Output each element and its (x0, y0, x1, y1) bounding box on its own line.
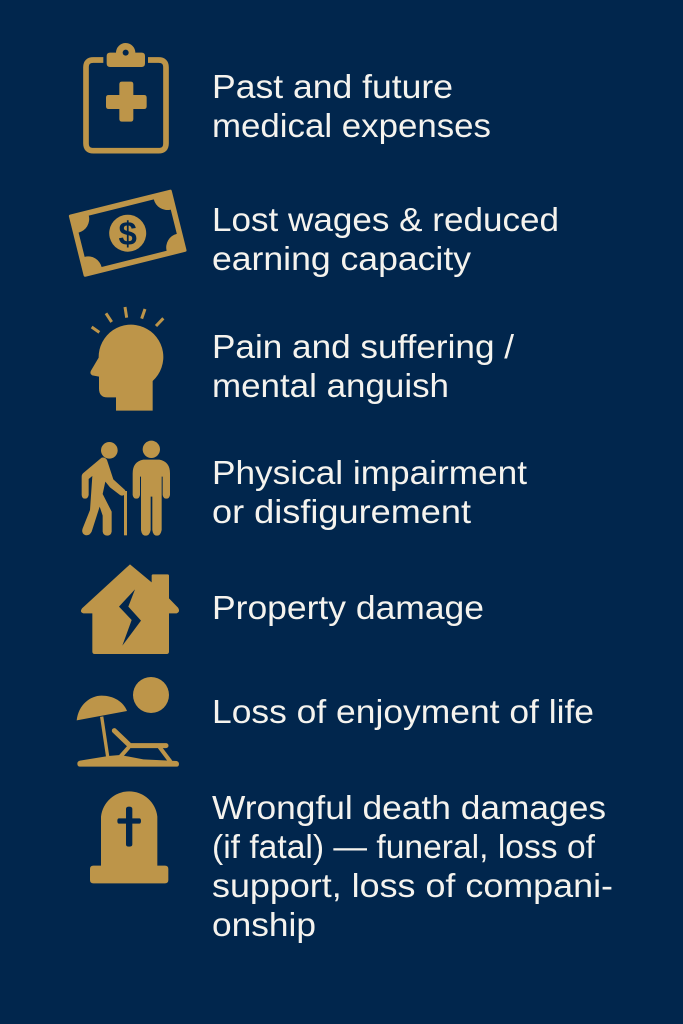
icon: head with pain rays (90, 307, 163, 411)
text: medical expenses: medical expenses (212, 107, 491, 144)
text: property damage: Property damage (212, 589, 484, 626)
text: pain and suffering: mental anguish (212, 367, 449, 404)
text: lost wages (212, 201, 559, 277)
icon: two people with cane (82, 441, 170, 536)
icon: banknote: $ (119, 215, 137, 252)
text: wrongful death damages (212, 789, 613, 943)
icon: banknote (69, 189, 187, 277)
text: physical impairment: or disfigurement (212, 493, 471, 530)
text: medical expenses: Past and future (212, 68, 453, 105)
text: pain and suffering: Pain and suffering / (212, 328, 515, 365)
text: lost wages: Lost wages & reduced (212, 201, 559, 238)
text: wrongful death damages: Wrongful death damages (212, 789, 606, 826)
text: wrongful death damages: support, loss of compani- (212, 867, 613, 904)
icon: cracked house (81, 564, 179, 654)
text: wrongful death damages: onship (212, 906, 316, 943)
icon: tombstone with cross (90, 791, 168, 883)
text: medical expenses (212, 68, 491, 144)
text: physical impairment (212, 454, 527, 530)
text: pain and suffering (212, 328, 515, 404)
icon: beach umbrella, sun and lounger (77, 677, 179, 767)
text: loss of enjoyment: Loss of enjoyment of life (212, 693, 594, 730)
text: lost wages: earning capacity (212, 240, 472, 277)
text: physical impairment: Physical impairment (212, 454, 527, 491)
icon: medical clipboard (86, 43, 166, 151)
text: wrongful death damages: (if fatal) — funeral, loss of (212, 828, 596, 865)
